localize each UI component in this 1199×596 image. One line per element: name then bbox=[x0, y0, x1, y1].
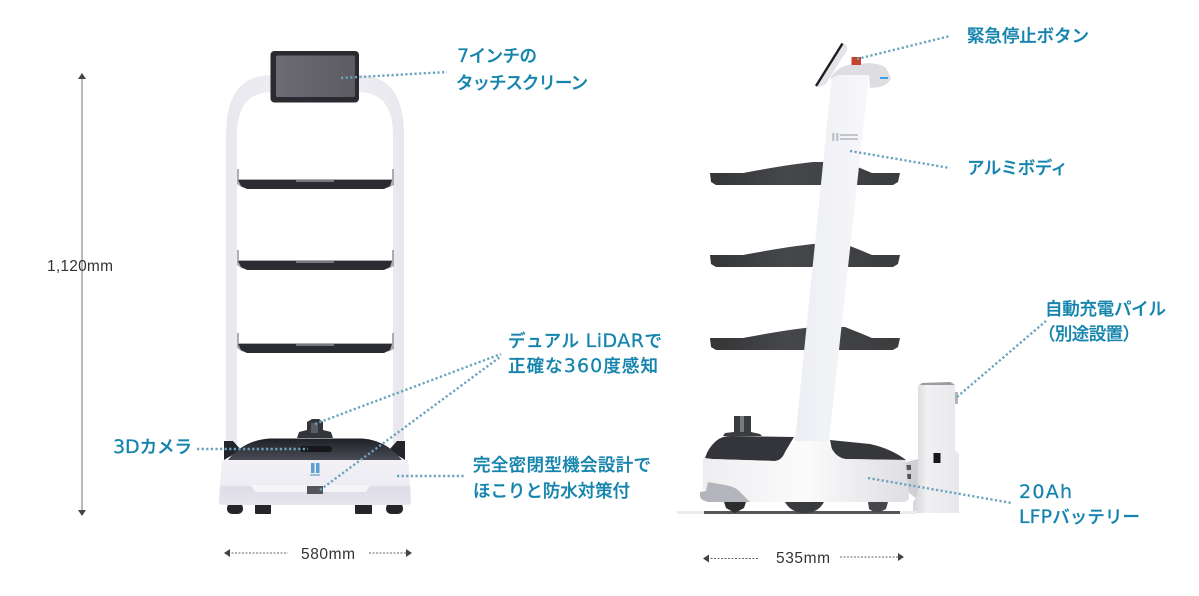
side base body bbox=[703, 440, 909, 502]
label: charging pile: 自動充電パイル bbox=[1045, 300, 1166, 320]
ground shadow bbox=[677, 511, 917, 514]
label: sealed design bbox=[473, 456, 651, 502]
emergency button bbox=[852, 57, 861, 65]
logo bbox=[310, 463, 320, 476]
base dome bbox=[228, 438, 402, 460]
leader: lidar to camera bbox=[315, 354, 501, 424]
label: 3D camera: 3Dカメラ bbox=[113, 436, 192, 458]
side shelf 3 bbox=[710, 327, 900, 350]
tablet bbox=[816, 43, 847, 87]
width dimension front: 580mm bbox=[301, 546, 355, 563]
label: emergency stop: 緊急停止ボタン bbox=[967, 27, 1089, 47]
leader: aluminum body bbox=[850, 151, 950, 168]
side base dark covers bbox=[705, 436, 906, 461]
side shelf 2 bbox=[710, 244, 900, 267]
label: dual lidar bbox=[508, 330, 662, 377]
width dimension side bbox=[703, 550, 904, 567]
leader: lidar to front window bbox=[320, 357, 500, 490]
label: battery: LFPバッテリー bbox=[1019, 506, 1140, 528]
height dimension bbox=[47, 73, 113, 516]
label: touch screen: タッチスクリーン bbox=[456, 74, 588, 94]
leader: sealed body bbox=[397, 475, 466, 477]
label: aluminum body: アルミボディ bbox=[967, 158, 1068, 179]
bumper bbox=[700, 482, 750, 502]
side shelf 1 bbox=[710, 162, 900, 185]
charging pile bbox=[913, 382, 959, 513]
label: touch screen bbox=[456, 45, 588, 94]
leader: charging pile bbox=[957, 321, 1046, 397]
shelf 3 bbox=[237, 333, 394, 353]
label: dual lidar: 正確な360度感知 bbox=[508, 355, 658, 377]
side camera bbox=[723, 416, 762, 436]
column logo bbox=[832, 133, 858, 141]
leader: touch screen bbox=[341, 72, 447, 78]
label: charging pile bbox=[1038, 300, 1166, 345]
leader: battery bbox=[868, 478, 1012, 503]
label: dual lidar: デュアル LiDARで bbox=[508, 330, 662, 352]
side wheels bbox=[724, 502, 888, 513]
width dimension side: 535mm bbox=[776, 550, 830, 567]
width dimension front bbox=[224, 546, 412, 563]
label: charging pile: （別途設置） bbox=[1038, 325, 1140, 345]
base slit bbox=[250, 485, 370, 492]
side view robot bbox=[677, 43, 959, 514]
lidar window bbox=[307, 486, 323, 494]
status light bbox=[880, 77, 888, 79]
touch screen bbox=[270, 51, 359, 102]
base body bbox=[219, 460, 411, 505]
label: sealed design: ほこりと防水対策付 bbox=[473, 482, 630, 502]
front sensor slot bbox=[300, 446, 332, 452]
front view robot bbox=[219, 51, 411, 514]
shelf 2 bbox=[237, 250, 394, 270]
height dimension: 1,120mm bbox=[47, 258, 113, 275]
charging pile connector bbox=[903, 459, 918, 500]
leader: emergency stop bbox=[857, 36, 950, 59]
leader: 3D camera bbox=[197, 448, 308, 450]
label: touch screen: 7インチの bbox=[457, 45, 537, 67]
base wheels bbox=[227, 503, 403, 514]
shelf 1 bbox=[237, 169, 394, 189]
leader lines bbox=[197, 36, 1046, 503]
base side wedges bbox=[224, 441, 405, 460]
aluminum column bbox=[795, 75, 869, 441]
label: sealed design: 完全密閉型機会設計で bbox=[473, 456, 651, 476]
frame tube bbox=[226, 75, 404, 445]
label: battery: 20Ah bbox=[1019, 481, 1072, 503]
head bbox=[830, 63, 891, 88]
label: battery bbox=[1019, 481, 1140, 528]
camera bbox=[297, 419, 333, 438]
